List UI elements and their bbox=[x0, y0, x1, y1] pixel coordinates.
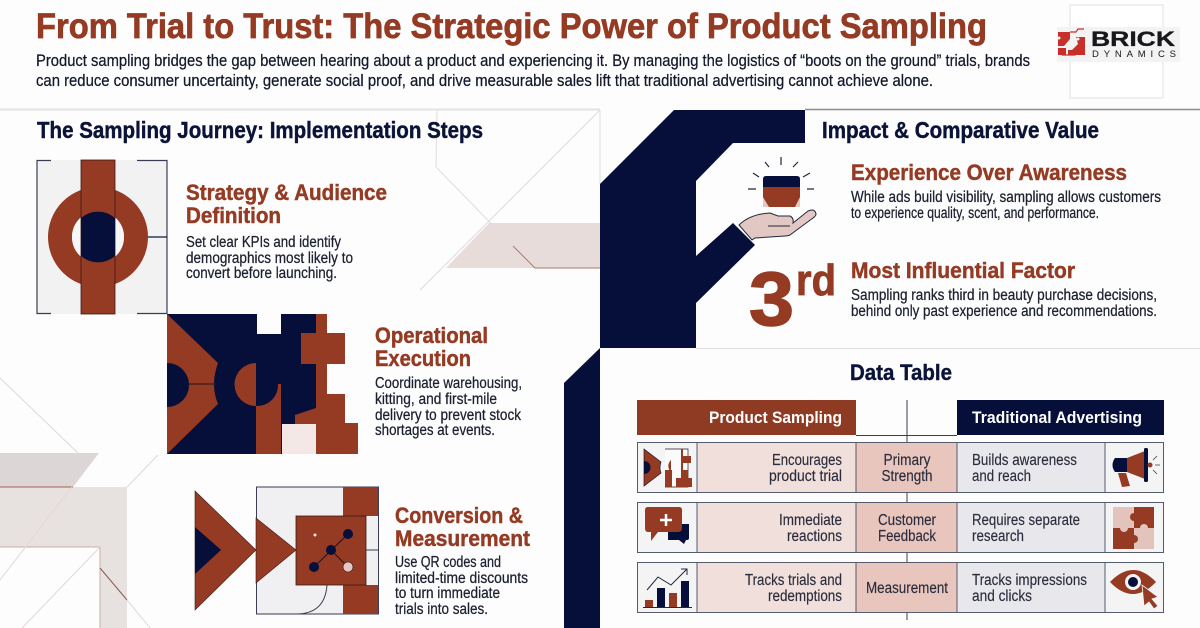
panel: step 1 strategy bbox=[37, 160, 387, 314]
logo: BRICK bbox=[1091, 28, 1175, 51]
step 3 heading: Measurement bbox=[395, 526, 530, 551]
panel: step 2 operational execution bbox=[167, 314, 522, 454]
step 3 body: Use QR codes and bbox=[395, 554, 501, 571]
step 3 body: limited-time discounts bbox=[395, 570, 528, 587]
step 2 body: delivery to prevent stock bbox=[375, 407, 521, 424]
step 1 heading: Strategy & Audience bbox=[186, 180, 387, 205]
icon: hand holding product bbox=[696, 157, 816, 303]
intro text bbox=[36, 52, 1030, 90]
row: customer feedback: reactions bbox=[787, 528, 842, 545]
row: customer feedback: Customer bbox=[878, 512, 936, 529]
step 2 heading: Execution bbox=[375, 346, 471, 371]
step 1 body: Set clear KPIs and identify bbox=[186, 234, 341, 251]
icon: eye with cursor bbox=[1110, 570, 1158, 609]
navy lower band bbox=[564, 348, 600, 628]
icon: mini blocks bbox=[644, 449, 692, 487]
intro text: can reduce consumer uncertainty, generate social proof, and drive measurable sales lift that traditional advertising cannot achieve alone. bbox=[36, 72, 933, 90]
column header: product sampling bbox=[637, 400, 856, 435]
row: primary strength bbox=[638, 442, 1164, 492]
step 2 body: kitting, and first-mile bbox=[375, 391, 497, 408]
icon: megaphone bbox=[1112, 448, 1160, 487]
heading: the sampling journey: The Sampling Journey: Implementation Steps bbox=[37, 117, 483, 143]
icon: operational blocks bbox=[167, 314, 358, 454]
step 1 body: convert before launching. bbox=[186, 265, 337, 282]
step 2 heading bbox=[375, 323, 488, 371]
row: primary strength: Builds awareness bbox=[972, 452, 1077, 469]
icon: puzzle bbox=[1113, 507, 1154, 549]
step 1 body bbox=[186, 234, 353, 282]
impact: most influential factor: behind only past experience and recommendations. bbox=[851, 303, 1157, 320]
step 1 heading bbox=[186, 180, 387, 228]
big number: 3rd bbox=[749, 256, 836, 342]
step 2 heading: Operational bbox=[375, 323, 488, 348]
icon: conversion funnel and nodes bbox=[195, 487, 378, 614]
data table bbox=[637, 400, 1164, 620]
title: From Trial to Trust: The Strategic Power of Product Sampling bbox=[36, 7, 987, 46]
row: customer feedback: research bbox=[972, 528, 1024, 545]
navy corner shape bbox=[600, 110, 805, 348]
column header: product sampling: Product Sampling bbox=[709, 409, 842, 427]
row: measurement: Measurement bbox=[866, 580, 949, 597]
row: measurement: Tracks impressions bbox=[972, 572, 1087, 589]
row: customer feedback: Feedback bbox=[878, 528, 936, 545]
row: primary strength: Strength bbox=[882, 468, 932, 485]
row: customer feedback bbox=[638, 502, 1164, 552]
heading: impact and comparative value: Impact & Comparative Value bbox=[822, 117, 1099, 143]
big number: 3rd: 3 bbox=[749, 257, 794, 342]
row: customer feedback: Requires separate bbox=[972, 512, 1080, 529]
logo bbox=[1057, 5, 1180, 98]
step 3 body: trials into sales. bbox=[395, 601, 488, 618]
step 2 body bbox=[375, 375, 522, 439]
row: primary strength: and reach bbox=[972, 468, 1031, 485]
column header: traditional advertising: Traditional Advertising bbox=[972, 409, 1142, 427]
impact: experience over awareness bbox=[851, 160, 1161, 222]
panel: step 3 conversion bbox=[195, 487, 530, 618]
impact: experience over awareness: to experience quality, scent, and performance. bbox=[851, 205, 1099, 222]
step 2 body: Coordinate warehousing, bbox=[375, 375, 522, 392]
impact: experience over awareness: While ads build visibility, sampling allows customers bbox=[851, 189, 1161, 206]
row: measurement: redemptions bbox=[768, 588, 842, 605]
step 3 body: to turn immediate bbox=[395, 585, 500, 602]
step 3 body bbox=[395, 554, 528, 618]
icon: speech bubbles bbox=[645, 507, 689, 544]
row: primary strength: Encourages bbox=[772, 452, 842, 469]
icon: bar chart with trend bbox=[643, 569, 692, 608]
step 1 heading: Definition bbox=[186, 203, 281, 228]
step 3 heading: Conversion & bbox=[395, 503, 523, 528]
row: primary strength: product trial bbox=[769, 468, 842, 485]
intro text: Product sampling bridges the gap between hearing about a product and experiencing it. By managing the logistics of “boots on the ground” trials, brands bbox=[36, 52, 1030, 70]
impact: most influential factor: Sampling ranks third in beauty purchase decisions, bbox=[851, 287, 1157, 304]
row: measurement: and clicks bbox=[972, 588, 1032, 605]
row: customer feedback: Immediate bbox=[779, 512, 842, 529]
row: measurement bbox=[638, 562, 1164, 612]
row: measurement: Tracks trials and bbox=[745, 572, 842, 589]
step 2 body: shortages at events. bbox=[375, 422, 495, 439]
impact: most influential factor bbox=[851, 258, 1157, 320]
logo: DYNAMICS bbox=[1092, 49, 1176, 60]
step 3 heading bbox=[395, 503, 530, 551]
heading: data table: Data Table bbox=[850, 360, 952, 385]
step 1 body: demographics most likely to bbox=[186, 250, 353, 267]
big number: 3rd: rd bbox=[796, 256, 836, 305]
column header: traditional advertising bbox=[957, 400, 1164, 435]
impact: experience over awareness: Experience Over Awareness bbox=[851, 160, 1127, 185]
icon: circle and bar bbox=[37, 160, 167, 314]
row: primary strength: Primary bbox=[884, 452, 931, 469]
impact: most influential factor: Most Influential Factor bbox=[851, 258, 1075, 283]
